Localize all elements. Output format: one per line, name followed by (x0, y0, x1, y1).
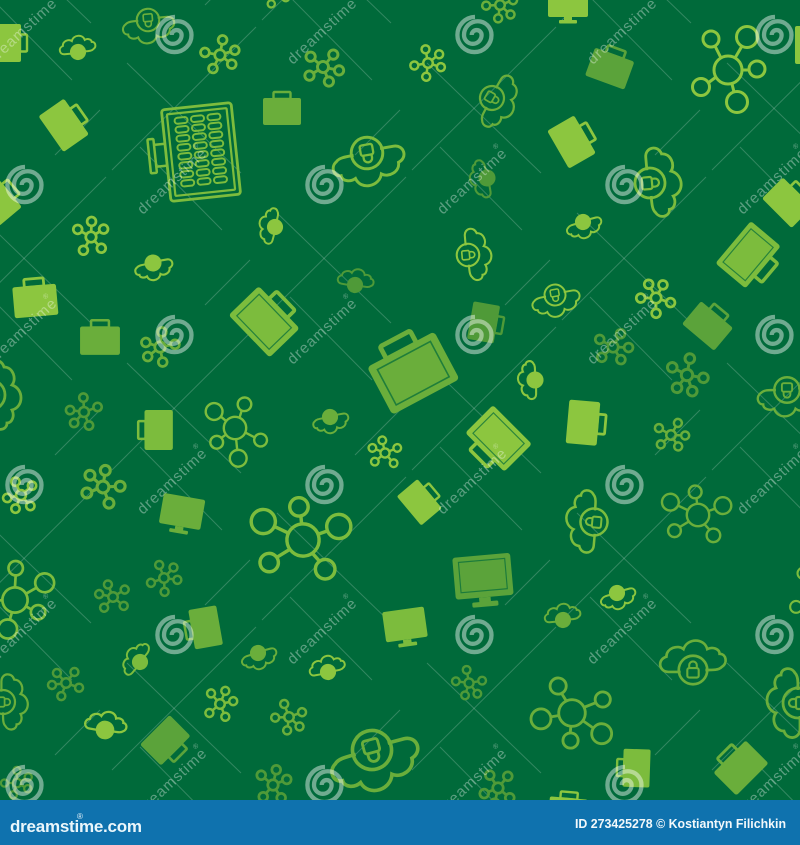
watermark text: ® (491, 441, 501, 451)
watermark text: ® (191, 141, 201, 151)
watermark text: ® (491, 741, 501, 751)
icon: case top centre right (585, 41, 637, 90)
watermark text: ® (641, 591, 651, 601)
icon: cloud lock top centre right (468, 68, 527, 134)
watermark text: ® (41, 291, 51, 301)
watermark text: dreamstime (584, 295, 660, 368)
watermark text: dreamstime (434, 145, 510, 218)
watermark text: dreamstime (434, 745, 510, 818)
icon: case bottom right (708, 735, 769, 796)
icon: cloud lock left edge (0, 360, 21, 429)
icon: cloud lock top left (121, 7, 176, 45)
watermark text: dreamstime (134, 745, 210, 818)
icon: case right middle (682, 296, 737, 351)
icon: case upper left (38, 95, 95, 152)
icon: case bottom left (140, 715, 195, 770)
icon: case top centre (263, 92, 301, 125)
icon: case top left edge (0, 24, 27, 62)
icon: case left edge (0, 171, 27, 226)
icon: big cloud lock bottom (324, 720, 426, 800)
footer credit: ID 273425278 © Kostiantyn Filichkin (575, 817, 786, 831)
watermark text: ® (341, 291, 351, 301)
icon: hub right (661, 483, 734, 546)
icon: cloud lock upper right (632, 146, 684, 219)
icon: hub right edge (790, 565, 800, 625)
icon: framed case centre (361, 321, 460, 415)
icon: cloud lock lower right (660, 641, 726, 684)
icon: hub left middle (191, 384, 278, 474)
icon: monitor top edge (548, 0, 588, 24)
icon: cloud lock lower left edge (0, 674, 28, 729)
watermark text: dreamstime (434, 445, 510, 518)
icon: hub lower centre (529, 676, 616, 752)
icon: monitor centre (382, 606, 429, 649)
icon: small winged discs (59, 34, 639, 742)
icon: cloud lock centre lower (563, 489, 610, 554)
icon: monitor left (158, 493, 205, 537)
icon: hub left edge (0, 550, 63, 650)
icon: case centre small (397, 475, 446, 525)
watermark text: ® (341, 591, 351, 601)
icon: case left lower (80, 320, 120, 355)
icon: case right of centre (566, 400, 607, 446)
icon: framed case centre right (459, 405, 532, 478)
watermark text: ® (641, 291, 651, 301)
watermark text: ® (491, 141, 501, 151)
icon: cloud lock middle right (529, 280, 583, 321)
watermark text: dreamstime (134, 445, 210, 518)
watermark text: dreamstime (584, 595, 660, 668)
icon: case lower left (182, 605, 223, 651)
icon: framed case right (715, 221, 787, 294)
icon: case upper right (547, 112, 602, 169)
icon: case top right edge (795, 26, 800, 64)
watermark text: ® (41, 591, 51, 601)
icon: case centre dim (467, 301, 506, 344)
watermark text: dreamstime (134, 145, 210, 218)
icon: large hub centre (249, 493, 355, 585)
icon: framed monitor lower centre (452, 553, 514, 609)
icon: case left middle (138, 410, 173, 450)
icon: cloud lock upper centre (329, 131, 408, 191)
watermark text: dreamstime (284, 595, 360, 668)
icon: case bottom edge (548, 790, 588, 827)
icon: case right edge (762, 173, 800, 228)
icon: cloud lock far right (767, 669, 800, 738)
watermark text: dreamstime (284, 295, 360, 368)
icon: case bottom centre right (616, 748, 651, 788)
footer bar (0, 800, 800, 845)
icon: large hub top right (692, 26, 765, 112)
footer logo text: dreamstime.com (10, 817, 142, 836)
icon: cloud lock right edge (758, 377, 800, 416)
watermark text: ® (191, 441, 201, 451)
icon: large outlined keyboard case (144, 103, 241, 203)
icon: cloud lock centre (455, 227, 493, 282)
icon: case left (12, 277, 58, 318)
icon: framed case centre left (229, 280, 306, 357)
footer logo mark: ® (77, 812, 83, 821)
watermark text: ® (191, 741, 201, 751)
